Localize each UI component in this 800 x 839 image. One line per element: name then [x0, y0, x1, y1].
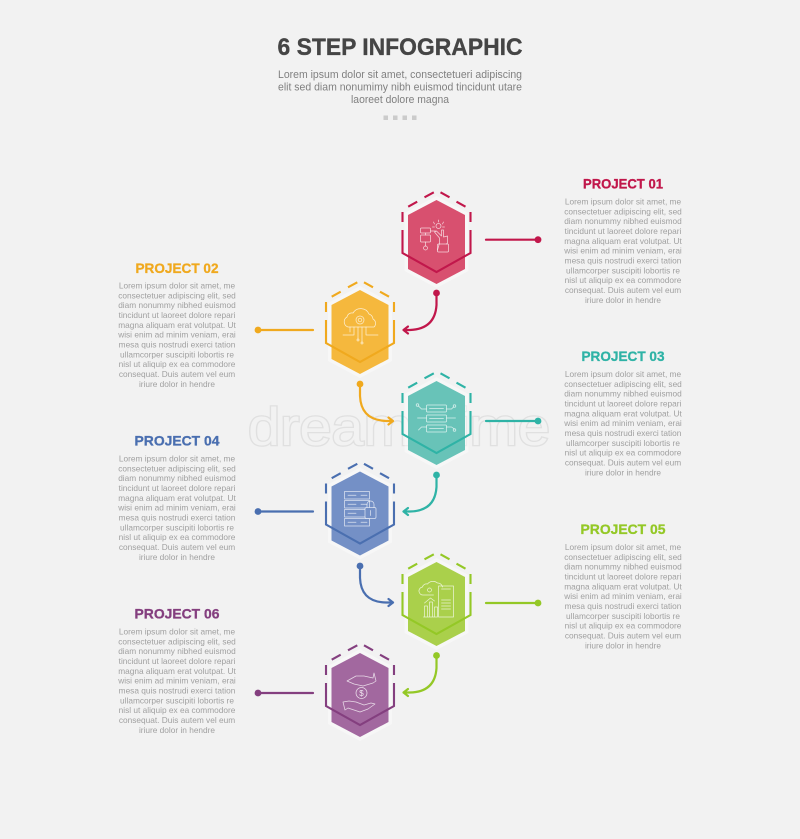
- step 4 text: mesa quis nostrudi exerci tation: [119, 512, 236, 522]
- step 1 text: diam nonummy nibhed euismod: [564, 216, 682, 226]
- step 4 text: tincidunt ut laoreet dolore repari: [119, 483, 236, 493]
- step 4 text: consectetuer adipiscing elit, sed: [118, 463, 236, 473]
- step 5 hexagon group: [402, 554, 470, 650]
- step 2 text: nisl ut aliquip ex ea commodore: [119, 359, 236, 369]
- step 2 text: diam nonummy nibhed euismod: [118, 300, 236, 310]
- step 3 lead line: [486, 418, 541, 424]
- step 6 text: magna aliquam erat volutpat. Ut: [118, 666, 236, 676]
- arrow: step 1 to step 2: [404, 290, 440, 334]
- step 2 text: iriure dolor in hendre: [139, 379, 215, 389]
- step 5 text: nisl ut aliquip ex ea commodore: [565, 621, 682, 631]
- step 2 text: tincidunt ut laoreet dolore repari: [119, 310, 236, 320]
- step 2 text: consectetuer adipiscing elit, sed: [118, 290, 236, 300]
- step 4 text: [117, 432, 236, 562]
- step 1 text: consequat. Duis autem vel eum: [565, 285, 681, 295]
- step 3 text: consectetuer adipiscing elit, sed: [564, 379, 682, 389]
- step 6 text: [117, 606, 236, 735]
- icon: server circuit: [416, 404, 456, 432]
- step 6 text: ullamcorper suscipiti lobortis re: [120, 695, 234, 705]
- step 1 text: Lorem ipsum dolor sit amet, me: [565, 196, 681, 206]
- step 5 text: Lorem ipsum dolor sit amet, me: [565, 542, 681, 552]
- step 3 text: tincidunt ut laoreet dolore repari: [565, 398, 682, 408]
- step 1 text: [563, 176, 682, 305]
- step 5 text: iriure dolor in hendre: [585, 640, 661, 650]
- step 2 text: consequat. Duis autem vel eum: [119, 369, 235, 379]
- step 3 text: mesa quis nostrudi exerci tation: [565, 428, 682, 438]
- step 5 lead line: [486, 600, 541, 606]
- step 4 text: Lorem ipsum dolor sit amet, me: [119, 454, 235, 464]
- step 1 text: iriure dolor in hendre: [585, 295, 661, 305]
- step 1 text: nisl ut aliquip ex ea commodore: [565, 275, 682, 285]
- icon: cloud report: [419, 581, 454, 617]
- step 1 text: PROJECT 01: [583, 176, 663, 192]
- step 4 text: iriure dolor in hendre: [139, 552, 215, 562]
- step 1 hexagon group: [402, 192, 470, 288]
- step 3 text: diam nonummy nibhed euismod: [564, 389, 682, 399]
- step 1 text: tincidunt ut laoreet dolore repari: [565, 226, 682, 236]
- step 2 hexagon group: [326, 282, 394, 378]
- step 5 text: diam nonummy nibhed euismod: [564, 562, 682, 572]
- step 2 text: ullamcorper suscipiti lobortis re: [120, 349, 234, 359]
- step 5 text: mesa quis nostrudi exerci tation: [565, 601, 682, 611]
- step 3 text: iriure dolor in hendre: [585, 467, 661, 477]
- icon: hands and coin: $: [359, 689, 364, 698]
- step 5 text: consequat. Duis autem vel eum: [565, 630, 681, 640]
- step 6 text: consectetuer adipiscing elit, sed: [118, 636, 236, 646]
- icon: cloud network: [343, 309, 378, 344]
- step 5 text: consectetuer adipiscing elit, sed: [564, 552, 682, 562]
- step 3 text: wisi enim ad minim veniam, erai: [563, 418, 682, 428]
- step 3 hexagon group: [402, 373, 470, 469]
- arrow: step 2 to step 3: [357, 381, 393, 424]
- step 1 text: consectetuer adipiscing elit, sed: [564, 206, 682, 216]
- step 6 text: nisl ut aliquip ex ea commodore: [119, 705, 236, 715]
- step 4 lead line: [255, 508, 313, 515]
- pagination dots: [384, 116, 416, 120]
- step 3 text: nisl ut aliquip ex ea commodore: [565, 448, 682, 458]
- step 4 text: wisi enim ad minim veniam, erai: [117, 503, 236, 513]
- step 2 text: wisi enim ad minim veniam, erai: [117, 330, 236, 340]
- step 6 text: tincidunt ut laoreet dolore repari: [119, 656, 236, 666]
- step 2 text: magna aliquam erat volutpat. Ut: [118, 320, 236, 330]
- step 5 text: [563, 521, 682, 650]
- step 4 text: diam nonummy nibhed euismod: [118, 473, 236, 483]
- step 3 text: PROJECT 03: [582, 348, 665, 364]
- step 6 text: iriure dolor in hendre: [139, 725, 215, 735]
- step 2 text: Lorem ipsum dolor sit amet, me: [119, 280, 235, 290]
- arrow: step 3 to step 4: [404, 472, 440, 515]
- subtitle: Lorem ipsum dolor sit amet, consectetueri adipiscing: [278, 69, 522, 81]
- step 2 lead line: [255, 327, 313, 333]
- step 3 text: ullamcorper suscipiti lobortis re: [566, 438, 680, 448]
- subtitle: elit sed diam nonumimy nibh euismod tincidunt utare: [278, 82, 522, 94]
- step 2 text: [117, 260, 236, 389]
- step 6 text: consequat. Duis autem vel eum: [119, 715, 235, 725]
- arrow: step 4 to step 5: [357, 563, 393, 606]
- step 6 lead line: [255, 690, 313, 696]
- subtitle: [278, 69, 522, 106]
- step 6 text: PROJECT 06: [134, 606, 220, 622]
- icon: secure server: [344, 492, 376, 526]
- subtitle: laoreet dolore magna: [351, 94, 449, 106]
- step 6 text: mesa quis nostrudi exerci tation: [119, 685, 236, 695]
- step 5 text: wisi enim ad minim veniam, erai: [563, 591, 682, 601]
- step 1 lead line: [486, 236, 541, 243]
- step 3 text: [563, 348, 682, 477]
- step 6 text: wisi enim ad minim veniam, erai: [117, 676, 236, 686]
- step 4 hexagon group: [326, 464, 394, 560]
- step 5 text: magna aliquam erat volutpat. Ut: [564, 581, 682, 591]
- step 1 text: ullamcorper suscipiti lobortis re: [566, 265, 680, 275]
- step 2 text: mesa quis nostrudi exerci tation: [119, 339, 236, 349]
- arrow: step 5 to step 6: [404, 652, 440, 696]
- step 3 text: Lorem ipsum dolor sit amet, me: [565, 369, 681, 379]
- step 4 text: nisl ut aliquip ex ea commodore: [119, 532, 236, 542]
- step 4 text: consequat. Duis autem vel eum: [119, 542, 235, 552]
- step 1 text: magna aliquam erat volutpat. Ut: [564, 236, 682, 246]
- step 4 text: ullamcorper suscipiti lobortis re: [120, 522, 234, 532]
- step 6 text: diam nonummy nibhed euismod: [118, 646, 236, 656]
- step 2 text: PROJECT 02: [136, 260, 219, 276]
- step 3 text: magna aliquam erat volutpat. Ut: [564, 408, 682, 418]
- step 5 text: PROJECT 05: [580, 521, 666, 537]
- step 6 hexagon group: [326, 645, 394, 741]
- step 4 text: magna aliquam erat volutpat. Ut: [118, 493, 236, 503]
- step 1 text: wisi enim ad minim veniam, erai: [563, 246, 682, 256]
- step 6 text: Lorem ipsum dolor sit amet, me: [119, 626, 235, 636]
- step 3 text: consequat. Duis autem vel eum: [565, 457, 681, 467]
- step 5 text: ullamcorper suscipiti lobortis re: [566, 611, 680, 621]
- step 5 text: tincidunt ut laoreet dolore repari: [565, 571, 682, 581]
- title: 6 STEP INFOGRAPHIC: [278, 34, 523, 61]
- step 1 text: mesa quis nostrudi exerci tation: [565, 255, 682, 265]
- step 4 text: PROJECT 04: [134, 432, 220, 448]
- icon: flowchart and hand: [420, 220, 448, 252]
- watermark: dreamstime: [248, 398, 550, 457]
